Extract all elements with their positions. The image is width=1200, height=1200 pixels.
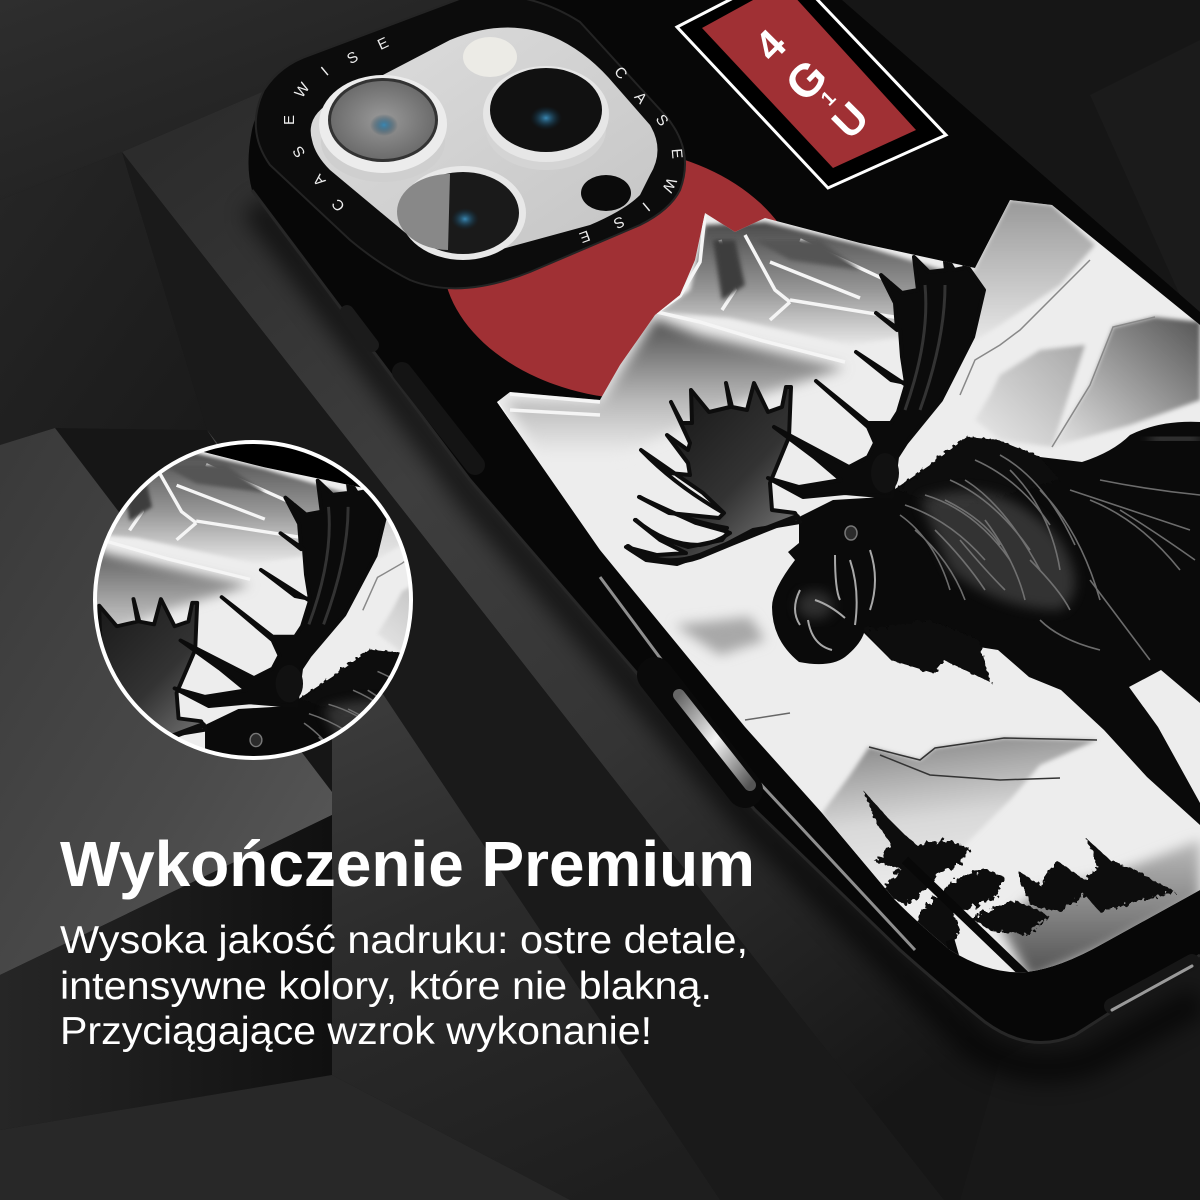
bottom speaker slot [1112, 962, 1192, 1006]
print: red sun [448, 160, 777, 396]
heading: Wykończenie Premium [60, 828, 755, 900]
CASEWISE ring text: S [652, 111, 672, 129]
sensor dot [581, 175, 631, 211]
body text: intensywne kolory, które nie blakną. [60, 965, 712, 1008]
top right peak [950, 200, 1095, 350]
CASEWISE ring text: S [289, 143, 309, 161]
side button left [402, 372, 475, 465]
phone shadow [255, 205, 1200, 1067]
magnified detail circle [93, 440, 413, 760]
body text: Wysoka jakość nadruku: ostre detale, [60, 919, 748, 962]
logo badge: G [775, 49, 837, 111]
moose body [772, 422, 1200, 825]
left antler [626, 383, 800, 564]
lens: upper right [483, 66, 609, 170]
print: mountain and moose artwork [480, 190, 1200, 990]
camera ring [256, 0, 685, 288]
foreground distant mountain [822, 738, 1097, 900]
CASEWISE ring text: E [668, 148, 685, 159]
rim highlight [600, 577, 915, 950]
logo badge [677, 0, 946, 188]
chrome side button [679, 695, 750, 785]
flash [463, 37, 517, 77]
left ridge shading [505, 318, 845, 455]
CASEWISE ring text: S [344, 48, 361, 68]
forehead knob [871, 453, 899, 493]
side button recess [655, 675, 745, 790]
CASEWISE ring text: S [611, 212, 627, 232]
lens: bottom [397, 166, 526, 260]
CASEWISE ring text: E [375, 34, 391, 54]
snow cracks [497, 215, 900, 455]
moose eye [845, 526, 857, 540]
logo badge: 4 [745, 20, 795, 70]
right cliffs [1052, 317, 1200, 447]
moose fur highlights [900, 455, 1200, 660]
moose fur edges [864, 437, 1060, 682]
pine trees [863, 790, 1175, 955]
logo badge: 1 [817, 87, 840, 110]
logo badge: U [823, 93, 877, 147]
CASEWISE ring text: W [291, 79, 314, 101]
phone body [248, 0, 1200, 1043]
upper mountain shading [660, 222, 975, 345]
body text: Przyciągające wzrok wykonanie! [60, 1010, 652, 1053]
CASEWISE ring text: A [310, 171, 329, 189]
moose fur sheen [920, 491, 1075, 610]
lens: upper left [319, 75, 447, 182]
CASEWISE ring text: A [631, 89, 650, 107]
right antler [768, 253, 984, 497]
body text [60, 919, 748, 1053]
pine trunk [928, 882, 1028, 972]
side port left [347, 312, 372, 345]
CASEWISE ring text: I [318, 64, 332, 79]
CASEWISE ring text: E [281, 115, 298, 125]
moose head highlights [795, 550, 875, 650]
camera glass [311, 28, 658, 258]
moose muzzle sheen [797, 591, 833, 619]
misty forest [1000, 840, 1200, 980]
CASEWISE ring text: C [328, 195, 349, 215]
CASEWISE ring text [281, 34, 685, 246]
CASEWISE ring text: W [658, 175, 680, 196]
CASEWISE ring text: C [610, 63, 631, 83]
CASEWISE ring text: E [577, 227, 592, 246]
CASEWISE ring text: I [639, 199, 653, 214]
